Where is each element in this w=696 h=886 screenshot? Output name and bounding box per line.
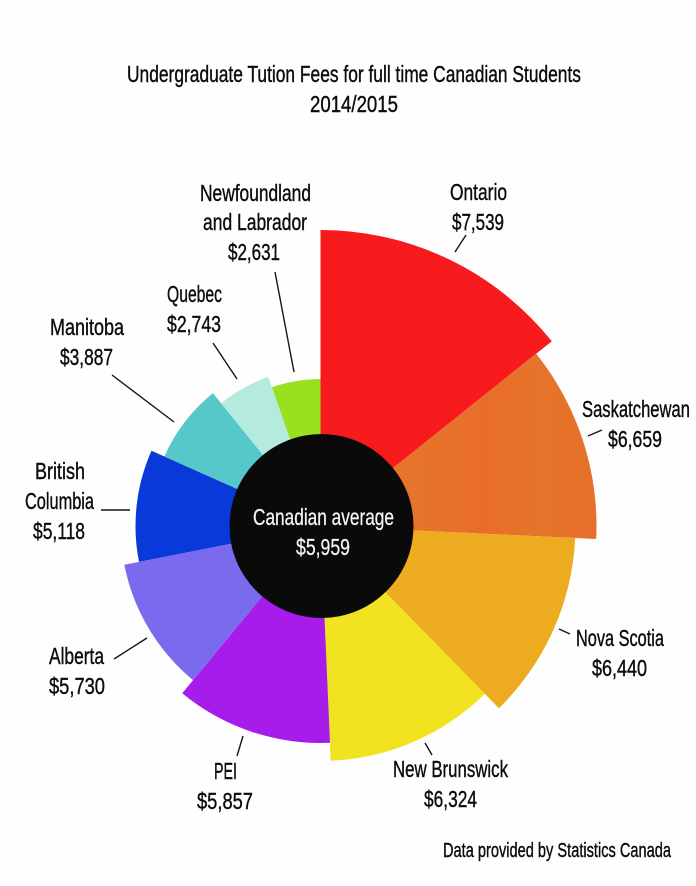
title bbox=[127, 61, 581, 117]
label: Alberta bbox=[49, 638, 147, 699]
chart: polar area chart of tuition fees bbox=[124, 230, 597, 761]
wedge: Nova Scotia bbox=[320, 526, 575, 708]
label: Quebec: Quebec bbox=[167, 281, 222, 307]
label: Manitoba bbox=[50, 314, 174, 422]
centre circle: Canadian average: Canadian average bbox=[253, 504, 394, 530]
wedge: Quebec bbox=[221, 377, 320, 526]
label: Ontario: Ontario bbox=[450, 179, 507, 205]
wedge: Newfoundland and Labrador bbox=[272, 379, 320, 526]
label: New Brunswick: $6,324 bbox=[424, 786, 477, 812]
label: Newfoundland and Labrador: and Labrador bbox=[203, 209, 307, 235]
label: Newfoundland and Labrador bbox=[200, 180, 311, 372]
label: PEI: PEI bbox=[214, 758, 237, 784]
label: Nova Scotia bbox=[559, 625, 664, 681]
label: Saskatchewan: $6,659 bbox=[608, 426, 662, 452]
label: Quebec bbox=[167, 281, 237, 379]
label: Nova Scotia: $6,440 bbox=[592, 655, 647, 681]
label: Alberta: Alberta bbox=[49, 643, 104, 669]
label: Newfoundland and Labrador: Newfoundland bbox=[200, 180, 311, 206]
centre circle: Canadian average: $5,959 bbox=[296, 534, 350, 560]
label: Manitoba: $3,887 bbox=[60, 344, 113, 370]
label: Manitoba: Manitoba bbox=[50, 314, 124, 340]
wedge: New Brunswick bbox=[320, 526, 485, 761]
wedge: Ontario bbox=[320, 230, 552, 526]
label: Ontario: $7,539 bbox=[452, 209, 504, 235]
label: Quebec: $2,743 bbox=[167, 311, 221, 337]
centre circle: Canadian average bbox=[230, 434, 414, 618]
wedge: Saskatchewan bbox=[320, 354, 597, 539]
label: Saskatchewan bbox=[582, 396, 690, 452]
label: Newfoundland and Labrador: $2,631 bbox=[228, 239, 280, 265]
label: New Brunswick: New Brunswick bbox=[393, 756, 508, 782]
label: British Columbia bbox=[25, 458, 130, 544]
label: Alberta: $5,730 bbox=[49, 673, 105, 699]
wedge: British Columbia bbox=[135, 451, 320, 562]
label: British Columbia: British bbox=[35, 458, 85, 484]
label: British Columbia: Columbia bbox=[25, 488, 94, 514]
label: British Columbia: $5,118 bbox=[33, 518, 85, 544]
label: Ontario bbox=[450, 179, 507, 252]
wedge: Alberta bbox=[124, 526, 320, 680]
wedge: Manitoba bbox=[164, 393, 320, 526]
label: New Brunswick bbox=[393, 743, 508, 812]
title: 2014/2015 bbox=[310, 91, 398, 117]
wedge: PEI bbox=[182, 526, 330, 743]
label: PEI: $5,857 bbox=[197, 788, 253, 814]
label: PEI bbox=[197, 736, 253, 814]
